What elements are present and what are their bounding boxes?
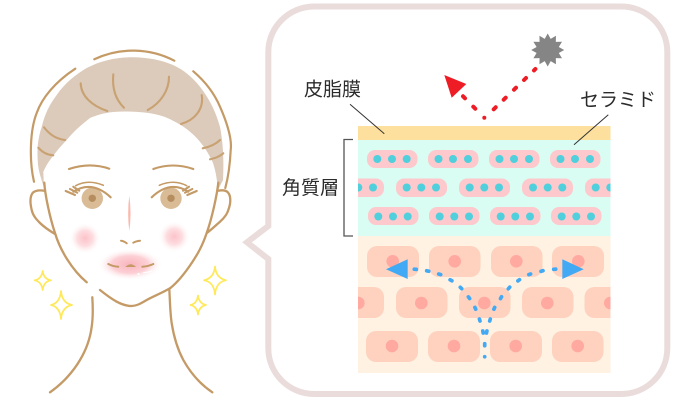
sebum film layer <box>358 126 610 140</box>
blue moisture arrows <box>386 259 584 357</box>
label: ceramide <box>574 90 656 145</box>
eye: right <box>152 182 197 209</box>
speech bubble <box>247 6 667 394</box>
eyebrows <box>69 165 193 169</box>
cheek: left <box>69 222 101 254</box>
face and neck outline <box>31 183 230 392</box>
red reflected UV arrow <box>444 69 535 118</box>
icon: gray sun <box>531 34 564 66</box>
label: sebum film <box>304 78 384 134</box>
lips <box>97 248 163 280</box>
illustration: woman's face <box>31 51 231 392</box>
cheek: right <box>158 221 190 253</box>
bracket <box>344 140 353 236</box>
label: sebum film: 皮脂膜 <box>304 78 361 100</box>
stratum corneum layer <box>358 140 610 236</box>
epidermal cells <box>358 246 610 362</box>
cell nuclei <box>352 255 617 352</box>
label: stratum corneum: 角質層 <box>282 177 339 199</box>
hair <box>31 51 231 190</box>
skin diagram <box>358 126 610 373</box>
nose <box>121 196 140 243</box>
lower epidermis layer <box>358 236 610 373</box>
ceramide dots <box>354 155 614 220</box>
ceramide cells <box>358 150 610 225</box>
sparkles <box>34 266 226 319</box>
label: ceramide: セラミド <box>580 90 656 111</box>
eye: left <box>66 182 111 209</box>
